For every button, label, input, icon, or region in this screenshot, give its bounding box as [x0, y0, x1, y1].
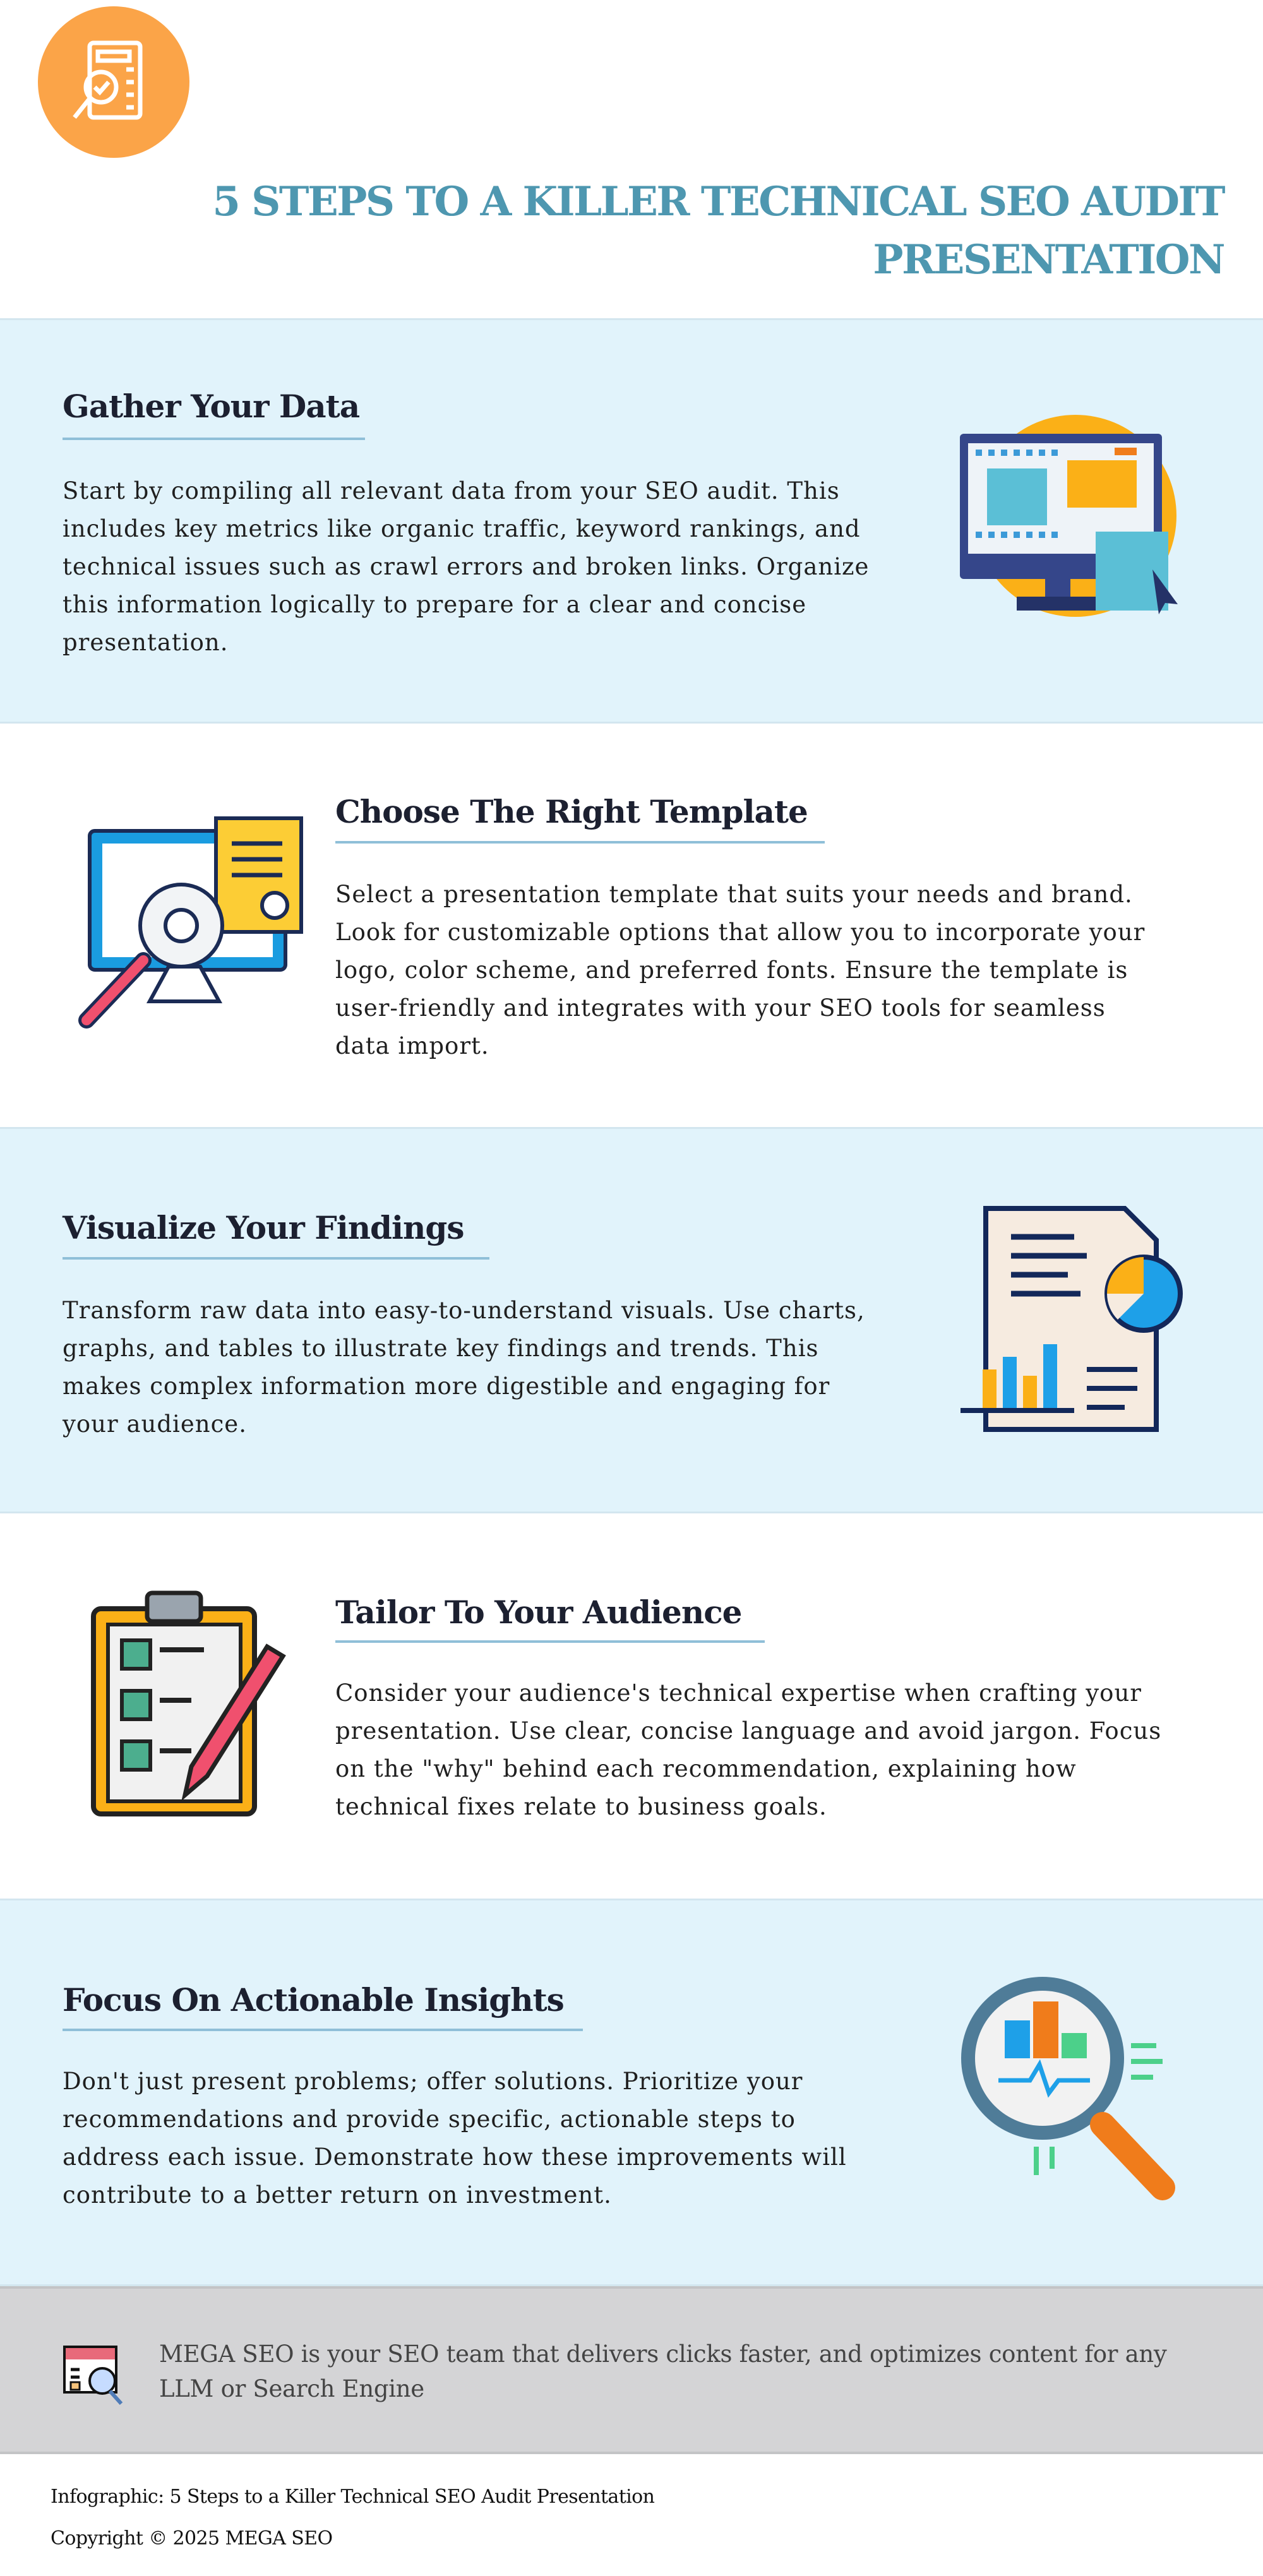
blurb text: LLM or Search Engine — [159, 2375, 424, 2402]
body text: recommendations and provide specific, actionable steps to — [63, 2106, 796, 2133]
panel: visualize your findings — [0, 1127, 1263, 1513]
icon: monitor — [960, 415, 1178, 617]
title: 5 STEPS TO A KILLER TECHNICAL SEO AUDIT — [212, 178, 1224, 225]
body text: Start by compiling all relevant data from your SEO audit. This — [63, 477, 840, 504]
body text: user-friendly and integrates with your SEO tools for seamless — [335, 994, 1106, 1022]
body text: contribute to a better return on investment. — [63, 2181, 612, 2209]
body text — [335, 1679, 1161, 1820]
title — [212, 178, 1225, 283]
body text: presentation. Use clear, concise language and avoid jargon. Focus — [335, 1717, 1161, 1744]
body text: graphs, and tables to illustrate key findings and trends. This — [63, 1335, 819, 1362]
icon: magnifier chart — [961, 1977, 1175, 2200]
body text: presentation. — [63, 629, 228, 656]
logo icon — [38, 6, 189, 158]
body text: Consider your audience's technical expertise when crafting your — [335, 1679, 1142, 1707]
heading: Gather Your Data — [63, 388, 359, 425]
panel: focus on actionable insights — [0, 1899, 1263, 2286]
panel: gather your data — [0, 318, 1263, 724]
heading: Visualize Your Findings — [63, 1209, 464, 1246]
body text: makes complex information more digestible and engaging for — [63, 1373, 830, 1400]
body text — [63, 477, 869, 656]
heading: Choose The Right Template — [335, 793, 808, 830]
credits: Copyright © 2025 MEGA SEO — [51, 2527, 332, 2549]
body text: includes key metrics like organic traffic, keyword rankings, and — [63, 515, 861, 542]
blurb text — [159, 2340, 1167, 2402]
icon: report chart — [961, 1206, 1183, 1432]
body text: address each issue. Demonstrate how these improvements will — [63, 2144, 847, 2171]
heading: Focus On Actionable Insights — [63, 1981, 564, 2018]
icon: clipboard — [91, 1591, 286, 1816]
body text: your audience. — [63, 1410, 247, 1438]
icon: template gear — [78, 816, 303, 1029]
body text: technical issues such as crawl errors and broken links. Organize — [63, 553, 869, 580]
body text: Transform raw data into easy-to-understand visuals. Use charts, — [63, 1297, 865, 1324]
footer: mega seo blurb — [0, 2286, 1263, 2454]
blurb text: MEGA SEO is your SEO team that delivers clicks faster, and optimizes content for any — [159, 2340, 1166, 2368]
credits: Infographic: 5 Steps to a Killer Technical SEO Audit Presentation — [51, 2486, 654, 2508]
body text — [63, 2068, 847, 2209]
body text: Look for customizable options that allow you to incorporate your — [335, 919, 1145, 946]
body text — [335, 881, 1145, 1059]
credits — [51, 2486, 654, 2549]
panel: tailor to your audience — [91, 1591, 1161, 1820]
title: PRESENTATION — [873, 236, 1224, 283]
heading: Tailor To Your Audience — [335, 1594, 741, 1631]
body text: technical fixes relate to business goals. — [335, 1793, 827, 1820]
body text: logo, color scheme, and preferred fonts. Ensure the template is — [335, 957, 1128, 984]
body text — [62, 1297, 865, 1438]
body text: data import. — [335, 1032, 489, 1059]
body text: Select a presentation template that suits your needs and brand. — [335, 881, 1133, 908]
panel: choose the right template — [78, 793, 1145, 1059]
body text: this information logically to prepare for a clear and concise — [63, 591, 806, 618]
body text: Don't just present problems; offer solutions. Prioritize your — [63, 2068, 803, 2095]
icon: seo page — [63, 2346, 123, 2405]
body text: on the "why" behind each recommendation, explaining how — [335, 1755, 1077, 1782]
